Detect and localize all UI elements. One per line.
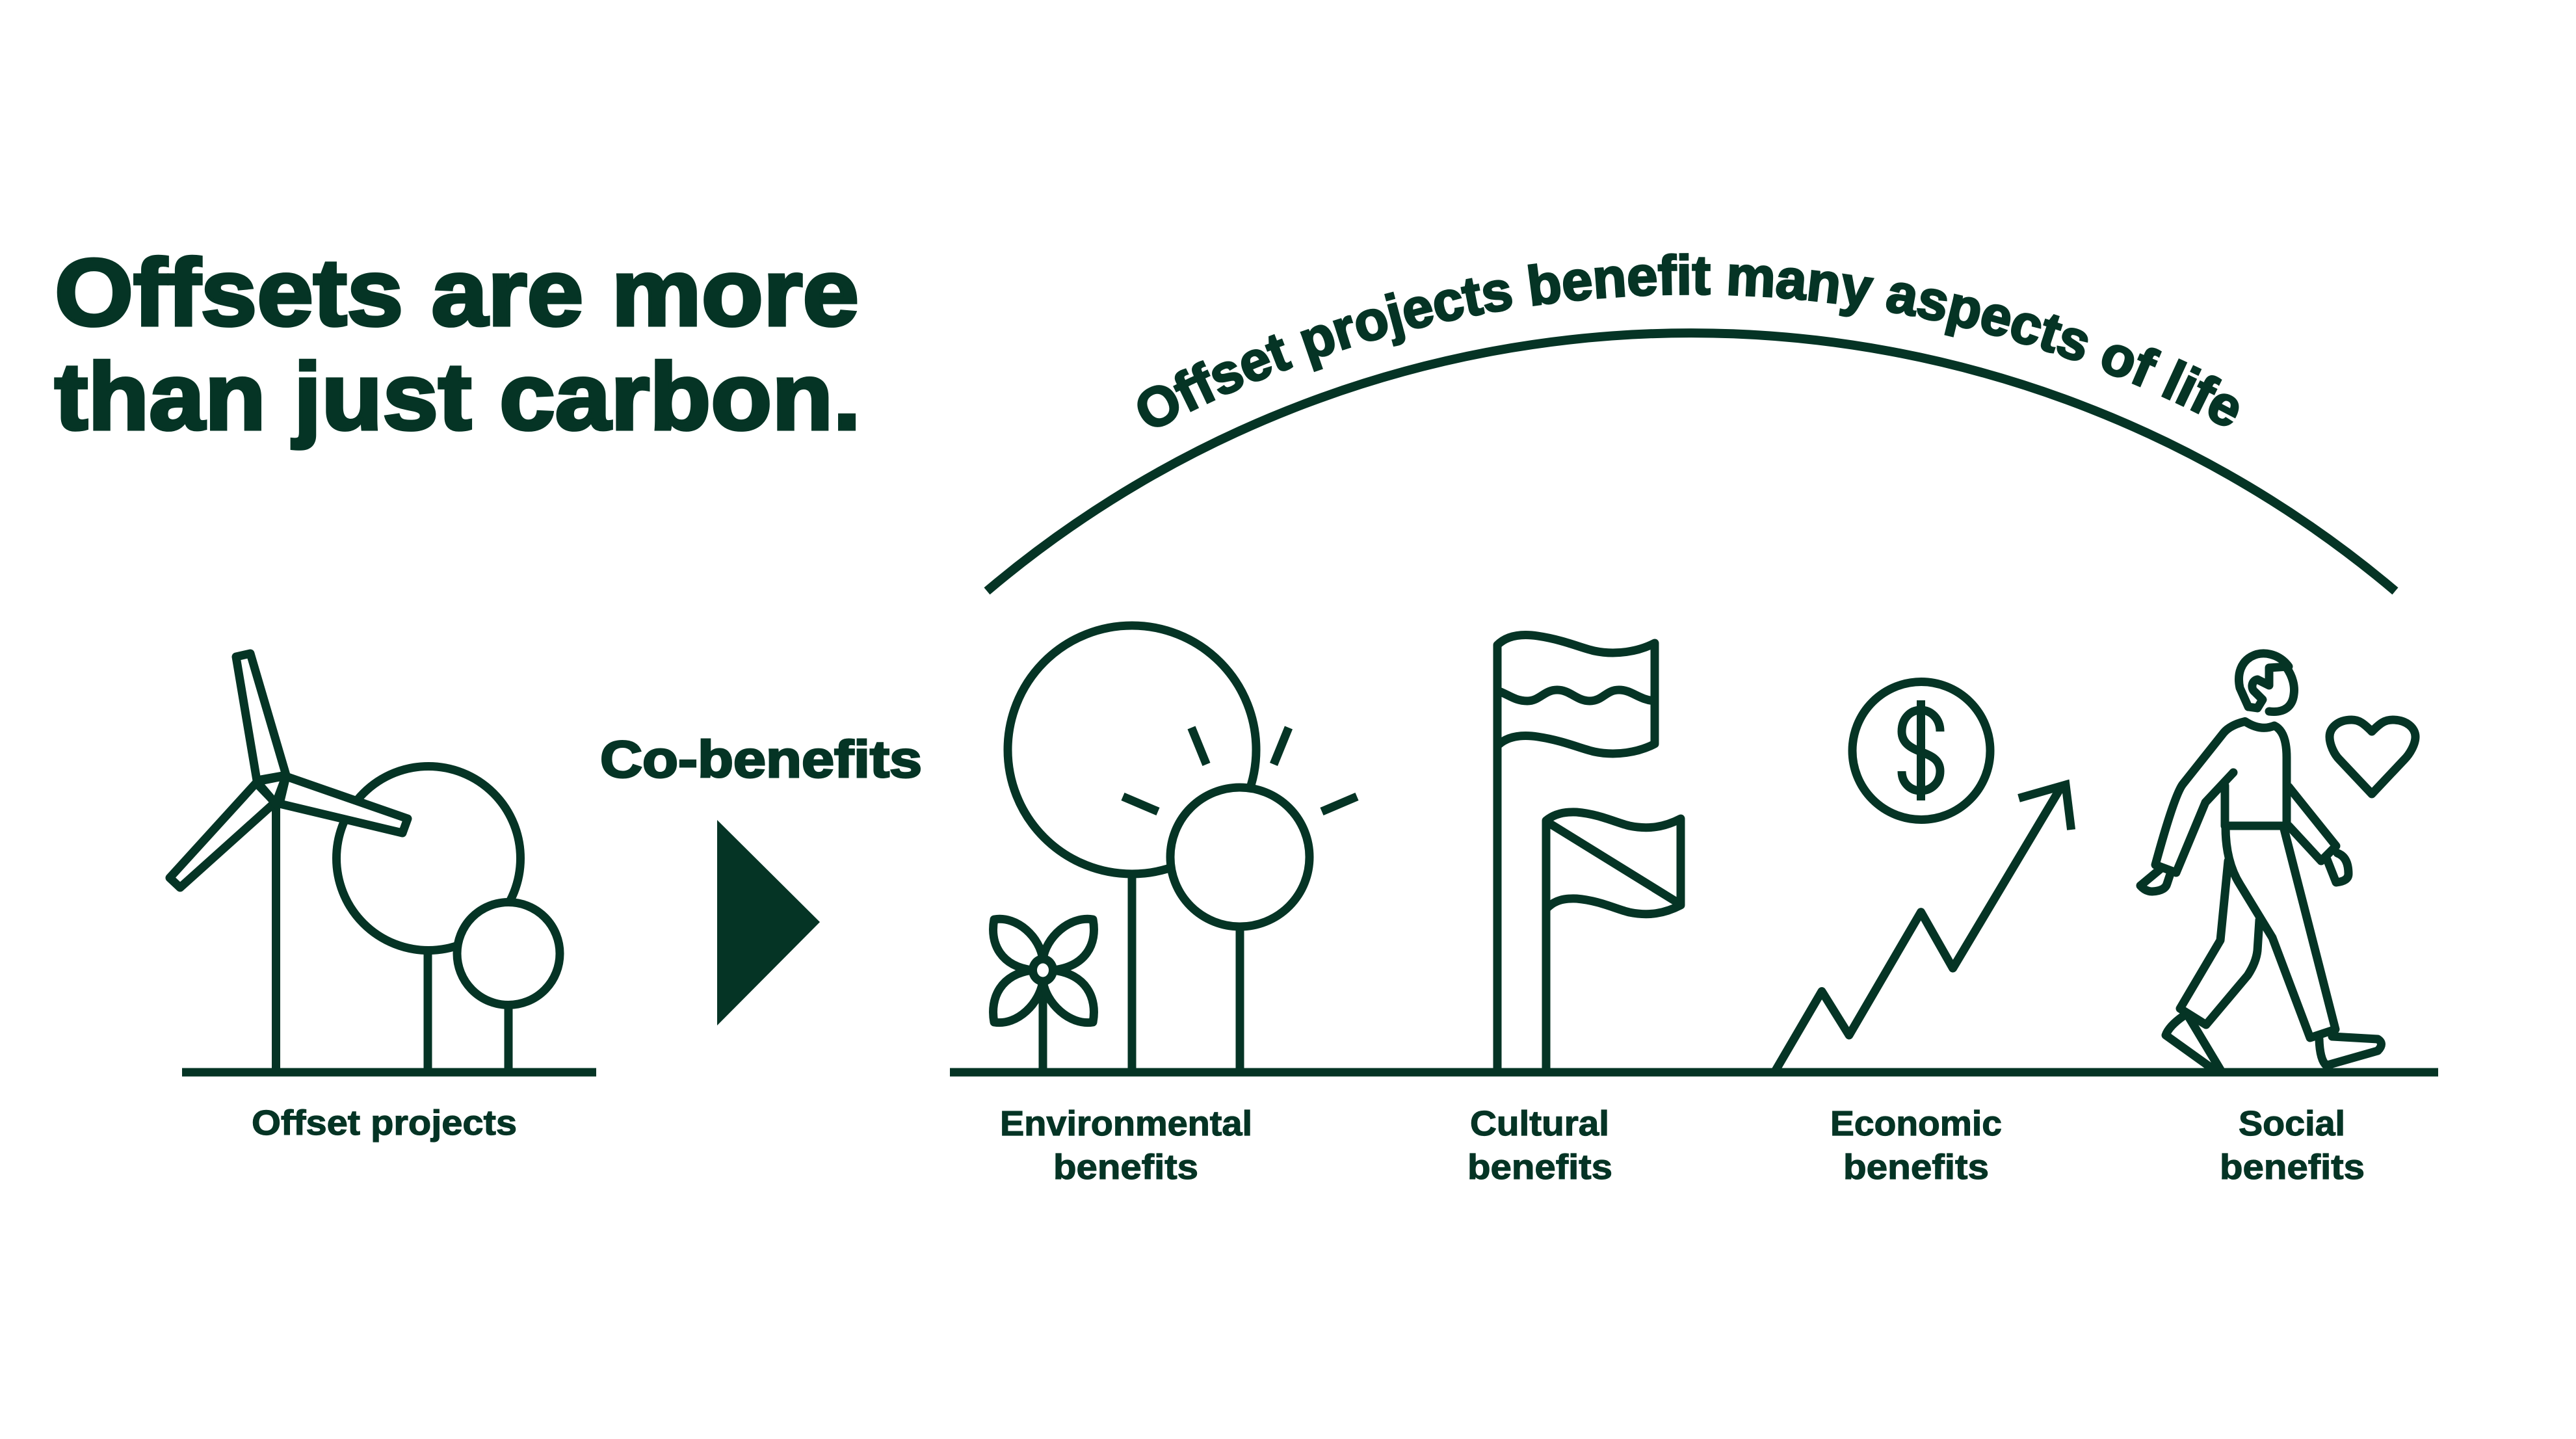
label: environmental benefits: benefits [1053,1148,1198,1187]
icon: dollar coin [1852,681,1990,819]
icon: flags [1497,635,1681,1072]
person: legs [2180,827,2335,1038]
person: feet [2166,1016,2381,1070]
icon: walking person [2140,653,2381,1070]
person: head [2239,653,2294,711]
title [55,239,861,449]
label: environmental benefits [1000,1104,1252,1187]
person: torso and left arm [2155,722,2287,873]
arc heading: curved text: Offset projects benefit many aspects of life [1137,253,2239,427]
panel: offset projects illustration [170,653,596,1072]
icon: heart [2330,720,2415,794]
label: cultural benefits: benefits [1467,1148,1612,1187]
label: environmental benefits: Environmental [1000,1104,1252,1143]
title: than just carbon. [55,343,861,449]
label: economic benefits: Economic [1830,1104,2002,1143]
label: social benefits [2220,1104,2365,1187]
heading: co-benefits: Co-benefits [600,730,922,788]
panel: benefits illustration [950,626,2438,1072]
label: social benefits: benefits [2220,1148,2365,1187]
label: offset projects: Offset projects [252,1103,517,1142]
icon: flower [993,919,1094,1072]
title: Offsets are more [55,239,859,345]
label: economic benefits [1830,1104,2002,1187]
person: left hand [2140,869,2170,891]
icon: wind turbine [170,653,408,1072]
icon: small tree [457,903,560,1072]
arrow: solid triangle [717,820,820,1025]
arc over benefits [987,333,2395,591]
label: cultural benefits: Cultural [1470,1104,1609,1143]
ground line: benefits [950,1068,2438,1077]
label: social benefits: Social [2239,1104,2345,1143]
person: right arm and hand [2289,787,2348,882]
label: cultural benefits [1467,1104,1612,1187]
icon: environmental trees and sun [1008,626,1357,1072]
ground line: offset projects [182,1068,596,1077]
icon: large tree [337,766,520,1072]
label: economic benefits: benefits [1843,1148,1989,1187]
icon: rising chart arrow [1776,785,2071,1070]
